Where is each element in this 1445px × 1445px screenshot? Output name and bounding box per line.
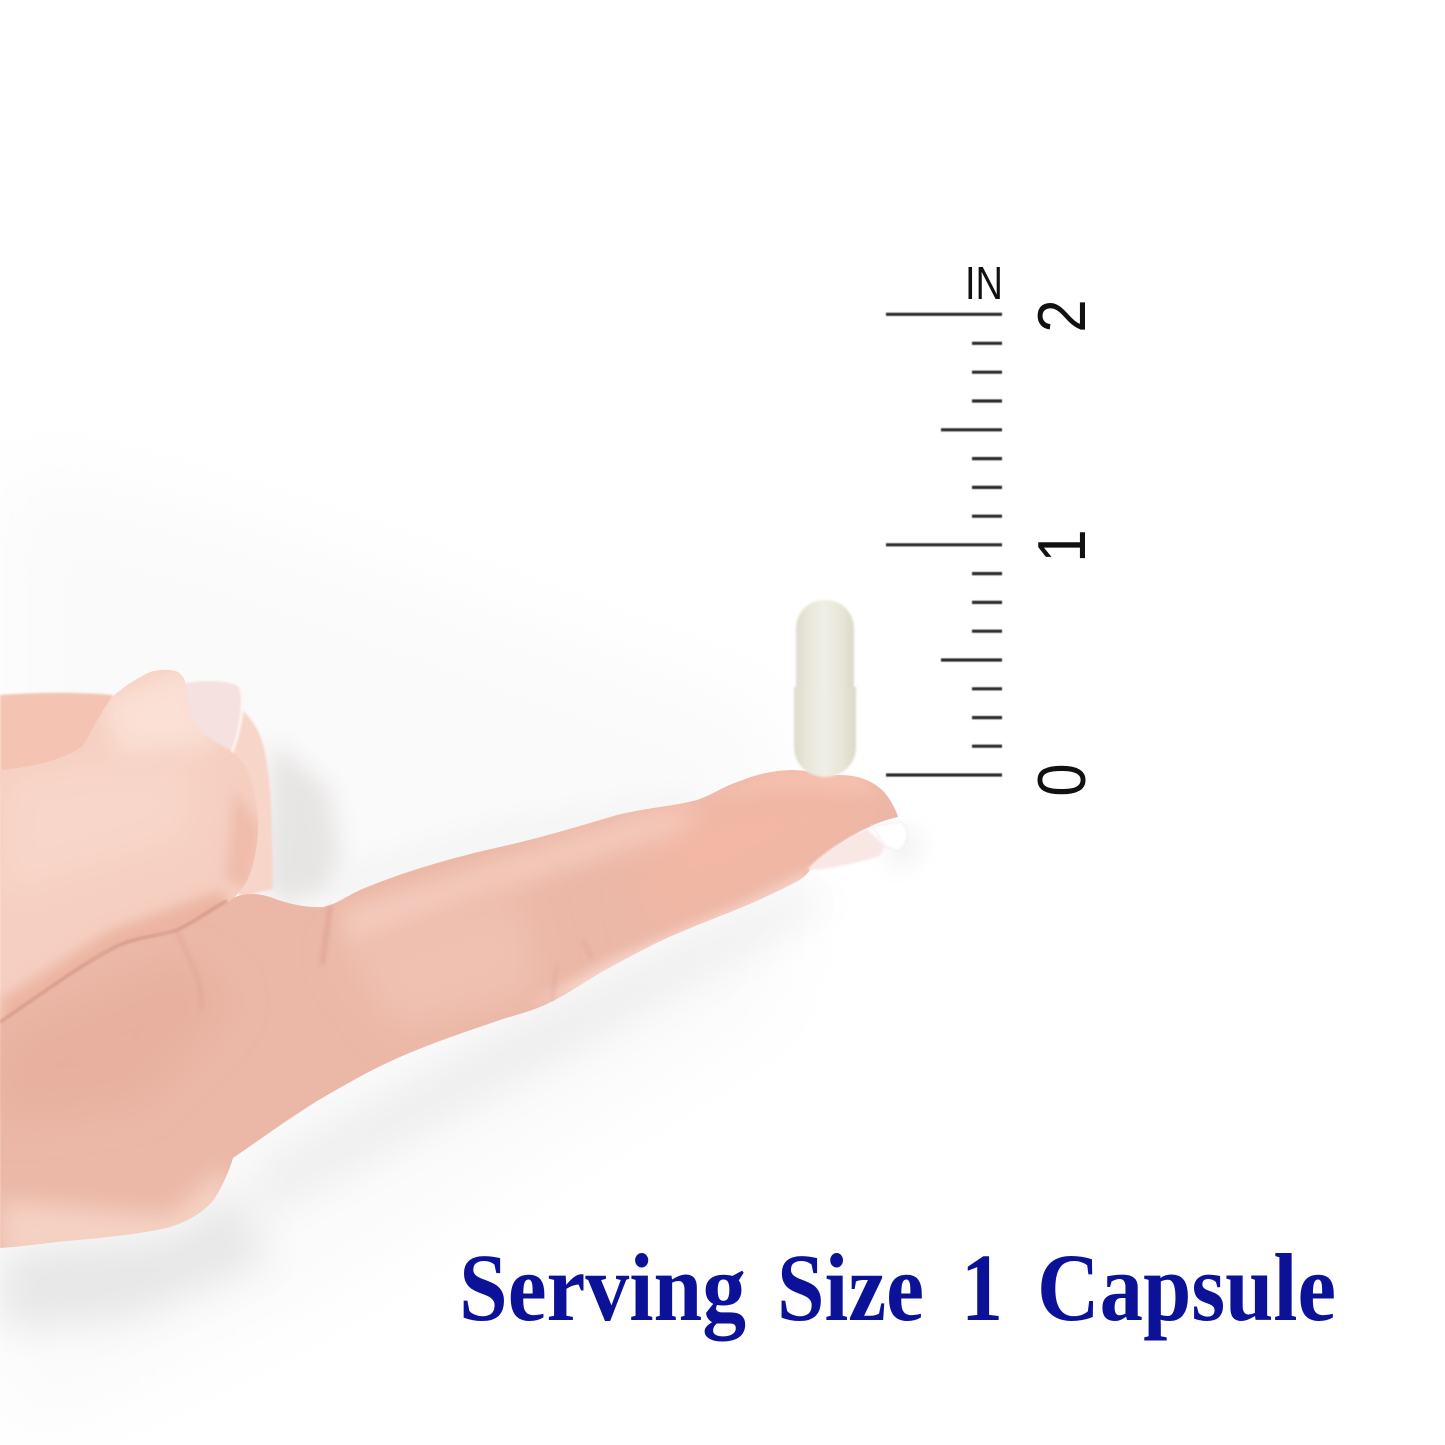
caption: serving size: 1 [961, 1234, 1003, 1341]
index finger and palm [0, 760, 920, 1260]
icon: capsule [794, 600, 856, 777]
ruler number 1: 1 [1023, 529, 1100, 563]
caption: serving size: Capsule [1037, 1234, 1336, 1341]
back finger behind thumb [180, 690, 273, 897]
thumb [0, 670, 258, 1022]
curled back finger [0, 693, 113, 790]
caption: serving size [459, 1234, 1336, 1341]
thumbnail [185, 681, 242, 750]
finger crease shadow [0, 901, 227, 1022]
icon: hand with pointing finger [0, 660, 920, 1260]
background shadow [0, 470, 920, 1445]
fingernail [807, 829, 885, 870]
caption: serving size: Size [777, 1234, 924, 1341]
ruler number 2: 2 [1023, 299, 1100, 333]
ruler number 0: 0 [1023, 763, 1100, 797]
ruler [886, 257, 1100, 797]
caption: serving size: Serving [459, 1234, 746, 1341]
ruler unit label: IN [965, 257, 1003, 309]
